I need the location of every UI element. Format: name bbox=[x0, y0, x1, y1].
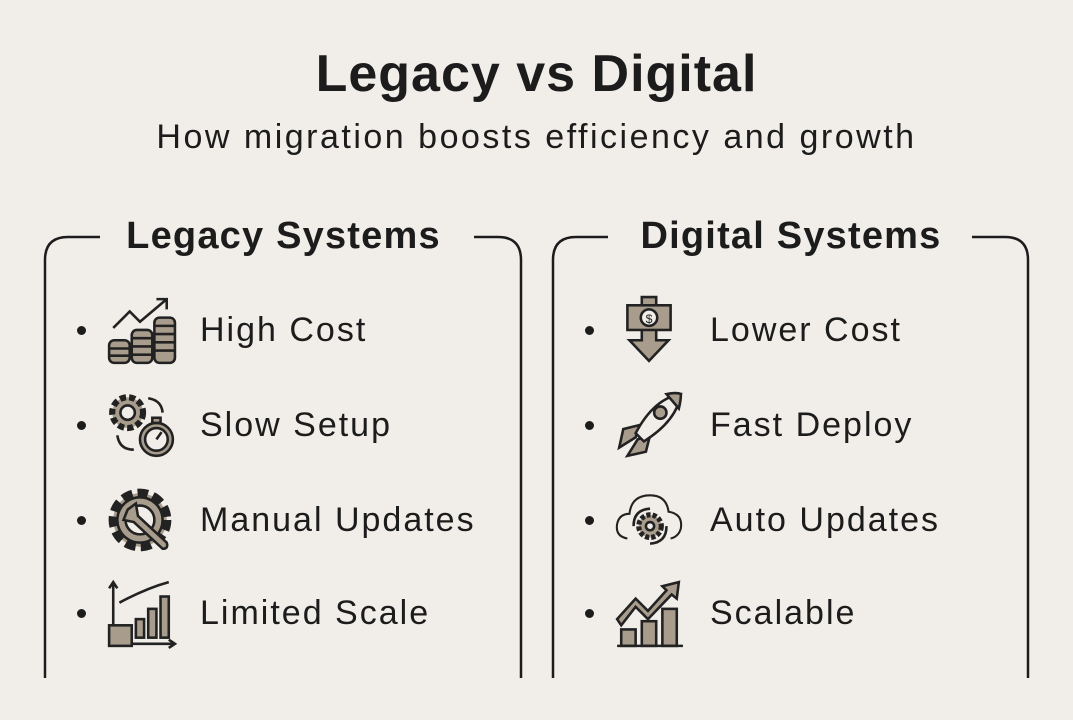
panel: legacy bbox=[77, 215, 476, 649]
panel: digital bbox=[585, 215, 942, 648]
item: fast deploy bbox=[585, 392, 913, 458]
heading: legacy: Legacy Systems bbox=[126, 215, 441, 257]
item: manual updates bbox=[77, 488, 476, 552]
item: lower cost: $ bbox=[646, 312, 653, 326]
item: high cost bbox=[77, 298, 367, 364]
item: lower cost: Lower Cost bbox=[710, 311, 902, 349]
subtitle: How migration boosts efficiency and growth bbox=[156, 118, 917, 156]
item: auto updates bbox=[585, 494, 940, 545]
item: scalable: Scalable bbox=[710, 594, 856, 632]
item: limited scale: Limited Scale bbox=[200, 594, 430, 632]
item: slow setup: Slow Setup bbox=[200, 406, 392, 444]
item: lower cost bbox=[585, 296, 902, 363]
item: slow setup bbox=[77, 394, 392, 458]
item: auto updates: Auto Updates bbox=[710, 501, 940, 539]
item: manual updates: Manual Updates bbox=[200, 501, 476, 539]
item: high cost: High Cost bbox=[200, 311, 367, 349]
item: limited scale bbox=[77, 580, 430, 649]
title: Legacy vs Digital bbox=[316, 45, 757, 103]
heading: digital: Digital Systems bbox=[640, 215, 942, 257]
item: fast deploy: Fast Deploy bbox=[710, 406, 913, 444]
item: scalable bbox=[585, 580, 856, 648]
